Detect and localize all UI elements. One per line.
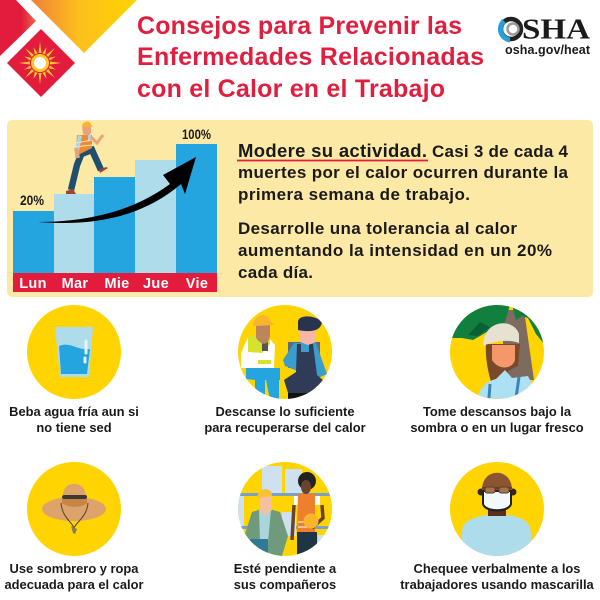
caption: trabajadores usando mascarilla: [400, 577, 595, 592]
logo: OSHA: SHA: [522, 14, 590, 46]
caption: [234, 561, 337, 592]
panel: modere su actividad: [7, 120, 593, 297]
caption: [410, 404, 584, 435]
icon: two seated workers: [238, 305, 332, 400]
title: [137, 12, 484, 103]
icon: straw hat: [27, 462, 121, 556]
caption: [400, 561, 595, 592]
caption: [9, 404, 139, 435]
caption: [4, 561, 144, 592]
caption: Use sombrero y ropa: [10, 561, 139, 576]
caption: Chequee verbalmente a los: [414, 561, 580, 576]
bar chart: daily intensity: Mie: [104, 276, 130, 292]
caption: no tiene sed: [36, 420, 112, 435]
title: con el Calor en el Trabajo: [137, 75, 445, 103]
caption: sus compañeros: [234, 577, 336, 592]
bar chart: daily intensity: 20%: [20, 193, 44, 208]
icon: worker climbing steps: [66, 121, 108, 194]
text: moderate activity: Casi 3 de cada 4: [432, 142, 569, 161]
icon: woman under tree: [450, 305, 544, 400]
text: moderate activity: cada día.: [238, 263, 313, 282]
panel: mask: [400, 462, 595, 592]
caption: adecuada para el calor: [4, 577, 144, 592]
bar chart: daily intensity: Mar: [62, 276, 88, 292]
icon: two coworkers in warehouse: [238, 462, 332, 556]
caption: para recuperarse del calor: [204, 420, 366, 435]
bar chart: daily intensity: 100%: [182, 127, 211, 142]
caption: Tome descansos bajo la: [423, 404, 572, 419]
bar chart: daily intensity: [13, 127, 217, 292]
text: moderate activity: [237, 140, 569, 282]
title: Enfermedades Relacionadas: [137, 43, 484, 71]
icon: glass of water: [27, 305, 121, 399]
bar chart: daily intensity: Vie: [186, 276, 208, 292]
arrow: rising intensity: [38, 157, 196, 223]
text: moderate activity: aumentando la intensidad en un 20%: [238, 241, 552, 260]
bar chart: daily intensity: Lun: [19, 276, 47, 292]
caption: Esté pendiente a: [234, 561, 337, 576]
panel: cold water: [9, 305, 139, 435]
caption: sombra o en un lugar fresco: [410, 420, 584, 435]
text: moderate activity: primera semana de trabajo.: [238, 185, 470, 204]
icon: worker wearing mask: [450, 462, 544, 556]
caption: Descanse lo suficiente: [216, 404, 354, 419]
bar chart: daily intensity: Jue: [143, 276, 169, 292]
text: moderate activity: muertes por el calor ocurren durante la: [238, 163, 569, 182]
panel: hat: [4, 462, 144, 592]
text: moderate activity: Desarrolle una tolerancia al calor: [238, 219, 517, 238]
logo: OSHA: [500, 14, 591, 57]
panel: coworkers: [234, 462, 337, 592]
panel: rest: [204, 305, 366, 435]
logo: corner sun emblem: [0, 0, 137, 97]
title: Consejos para Prevenir las: [137, 12, 462, 40]
text: moderate activity: Modere su actividad.: [238, 140, 427, 161]
panel: shade: [410, 305, 584, 435]
caption: Beba agua fría aun si: [9, 404, 139, 419]
logo: OSHA: osha.gov/heat: [505, 43, 591, 57]
caption: [204, 404, 366, 435]
